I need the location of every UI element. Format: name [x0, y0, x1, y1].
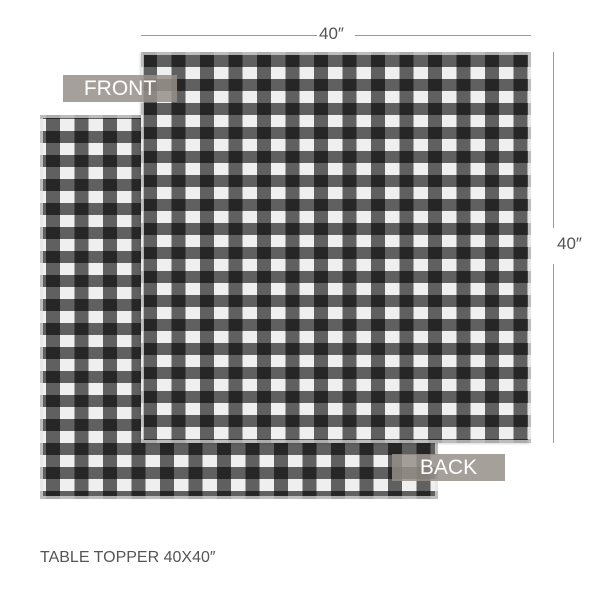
label: front: FRONT: [84, 76, 156, 100]
label: back: [392, 454, 505, 481]
label: front: [63, 75, 177, 102]
title: TABLE TOPPER 40X40″: [40, 549, 216, 566]
dimension: width: 40″: [319, 24, 344, 43]
label: back: BACK: [420, 456, 477, 478]
front fabric: [141, 52, 531, 443]
dimension: height: 40″: [557, 234, 582, 253]
back fabric: [40, 115, 438, 499]
